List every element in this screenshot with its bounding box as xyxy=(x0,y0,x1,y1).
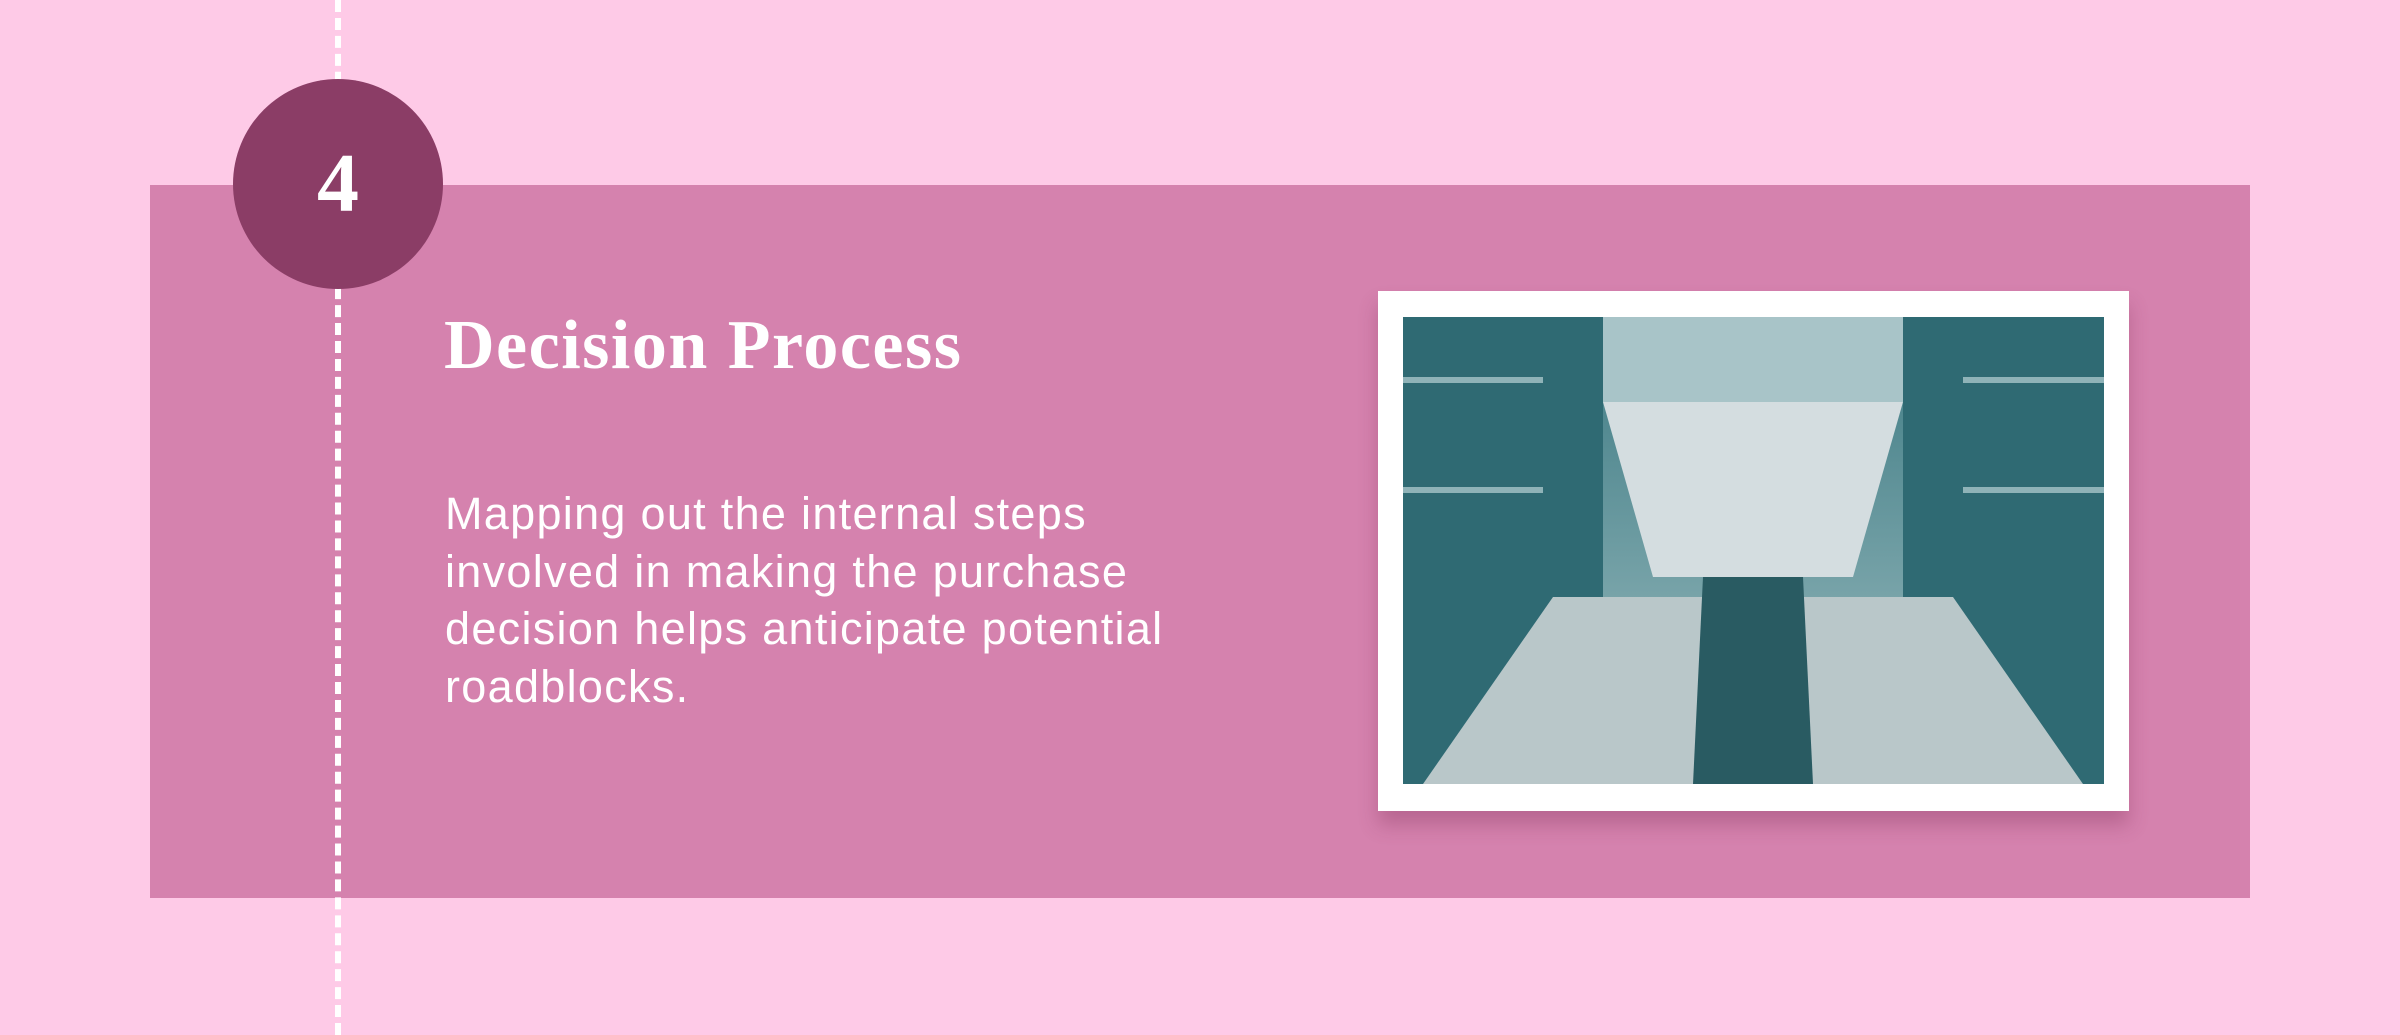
description text xyxy=(445,488,1163,712)
step number circle xyxy=(233,79,443,289)
heading: Decision Process xyxy=(444,307,962,384)
dashed timeline line xyxy=(335,0,341,1035)
description text: decision helps anticipate potential xyxy=(445,603,1163,654)
panel: main card xyxy=(150,185,2250,898)
description text: roadblocks. xyxy=(445,660,689,712)
description text: Mapping out the internal steps xyxy=(445,488,1087,539)
photo frame: escalators xyxy=(1378,291,2129,811)
description text: involved in making the purchase xyxy=(445,546,1128,596)
step number circle: 4 xyxy=(317,137,359,230)
